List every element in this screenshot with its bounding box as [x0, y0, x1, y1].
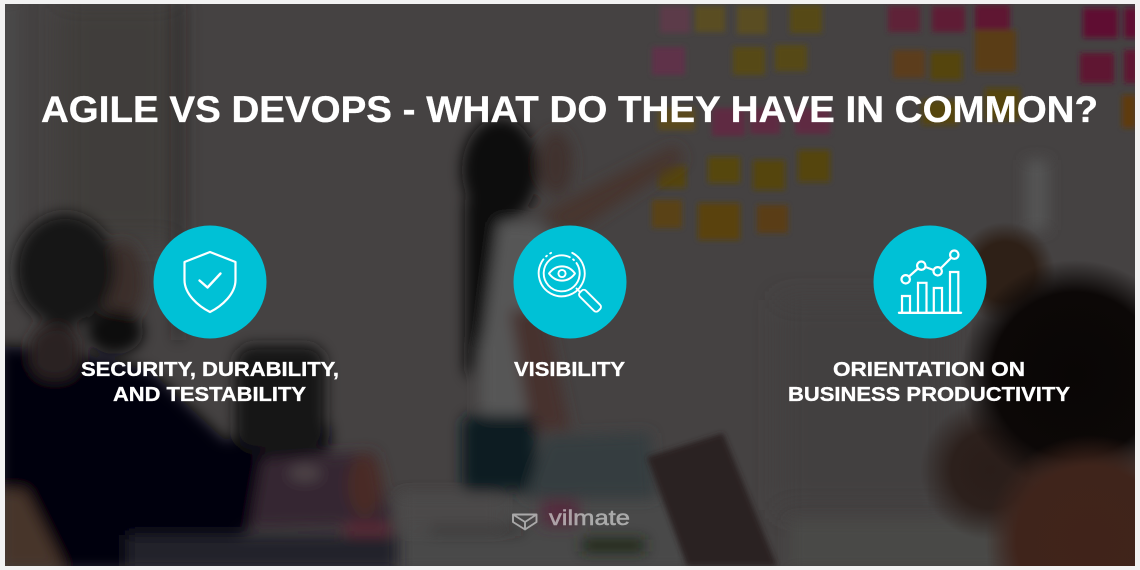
right foreground person: [920, 222, 1140, 570]
label: orientation: [788, 358, 1070, 406]
label: security: SECURITY, DURABILITY,: [81, 358, 339, 381]
sticky notes: [652, 5, 1138, 240]
icon: bar chart with trend line: [874, 226, 986, 338]
column: orientation on business productivity: [788, 226, 1070, 406]
title: AGILE VS DEVOPS - WHAT DO THEY HAVE IN COMMON?: [41, 89, 1098, 130]
icon: shield with check: [154, 226, 266, 338]
label: visibility: VISIBILITY: [514, 358, 625, 381]
label: security: AND TESTABILITY: [113, 383, 306, 406]
label: security: [81, 358, 339, 406]
logo: vilmate: [513, 507, 630, 530]
label: orientation: BUSINESS PRODUCTIVITY: [788, 383, 1070, 406]
column: visibility: [514, 226, 626, 381]
wordmark: vilmate: [549, 507, 630, 530]
icon: magnifier with eye: [514, 226, 626, 338]
label: orientation: ORIENTATION ON: [833, 358, 1025, 381]
left person, woman and desk: [0, 118, 685, 570]
icon: vilmate envelope mark: [513, 514, 536, 530]
column: security, durability, and testability: [81, 226, 339, 406]
